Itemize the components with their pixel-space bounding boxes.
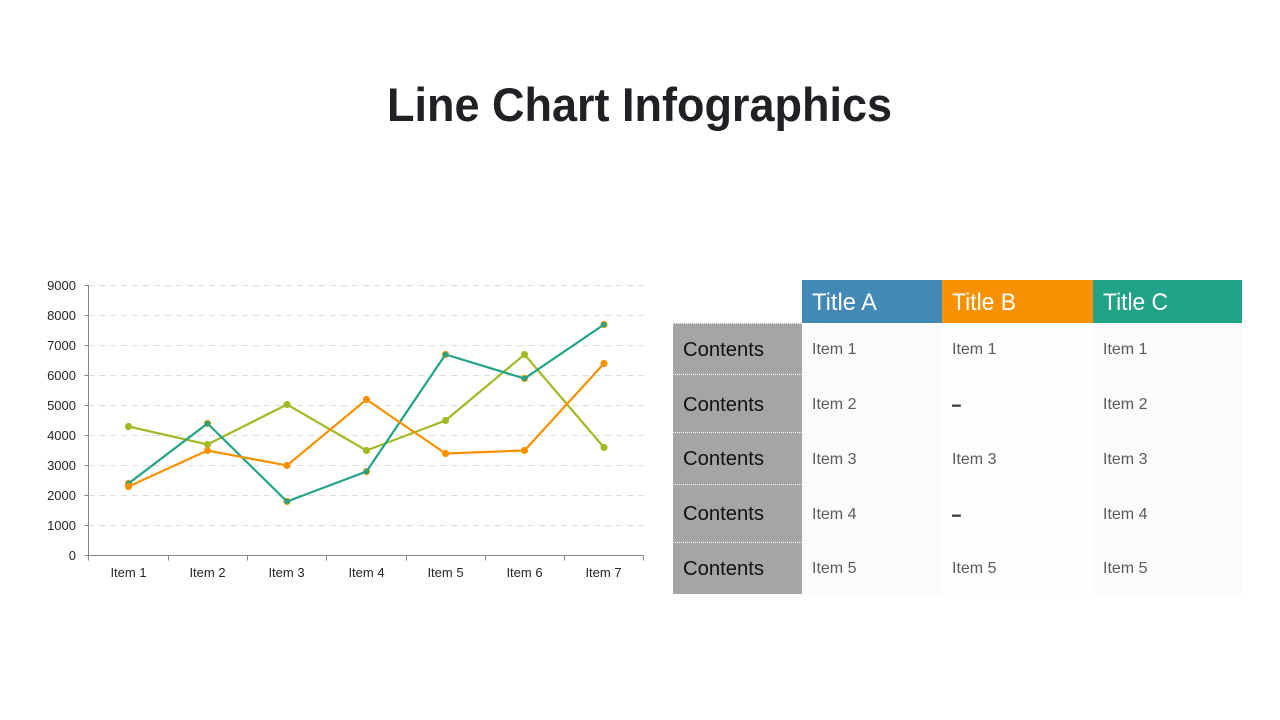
column C cells: Item 5 (1103, 560, 1148, 577)
y axis labels: 4000 (47, 428, 76, 443)
line chart (47, 278, 644, 580)
title: Line Chart Infographics (387, 78, 892, 131)
header: Title A: Title A (812, 289, 877, 316)
x axis labels: Item 3 (268, 565, 305, 580)
x axis labels: Item 1 (110, 565, 147, 580)
x axis labels: Item 6 (506, 565, 543, 580)
column A cells (802, 323, 942, 594)
column A cells: Item 4 (812, 506, 857, 523)
y axis labels: 9000 (47, 278, 76, 293)
column C cells: Item 1 (1103, 341, 1148, 358)
y axis labels: 7000 (47, 338, 76, 353)
x axis labels (110, 565, 622, 580)
row labels column: Contents (683, 503, 764, 525)
y axis labels: 1000 (47, 518, 76, 533)
header: Title B (942, 280, 1093, 323)
column B cells: – (952, 397, 961, 414)
y axis labels: 8000 (47, 308, 76, 323)
column C cells: Item 4 (1103, 506, 1148, 523)
y axis labels (47, 278, 76, 563)
y axis labels: 5000 (47, 398, 76, 413)
row labels column: Contents (683, 339, 764, 361)
column C cells: Item 3 (1103, 451, 1148, 468)
x axis labels: Item 5 (427, 565, 464, 580)
row labels column (673, 323, 802, 594)
header: Title B: Title B (952, 289, 1016, 316)
x axis labels: Item 7 (585, 565, 622, 580)
y axis labels: 3000 (47, 458, 76, 473)
column B cells (942, 323, 1093, 594)
comparison table (673, 280, 1242, 594)
header: Title A (802, 280, 942, 323)
header: Title C (1093, 280, 1242, 323)
column B cells: – (952, 507, 961, 524)
x axis labels: Item 4 (348, 565, 385, 580)
y axis labels: 0 (69, 548, 76, 563)
column B cells: Item 1 (952, 341, 997, 358)
series: lime (125, 351, 608, 454)
series: orange (125, 360, 608, 490)
row labels column: Contents (683, 558, 764, 580)
column A cells: Item 2 (812, 396, 857, 413)
column C cells (1093, 323, 1242, 594)
column C cells: Item 2 (1103, 396, 1148, 413)
column A cells: Item 1 (812, 341, 857, 358)
x axis labels: Item 2 (189, 565, 226, 580)
y axis labels: 6000 (47, 368, 76, 383)
row labels column: Contents (683, 448, 764, 470)
header: Title C: Title C (1103, 289, 1168, 316)
column B cells: Item 3 (952, 451, 997, 468)
column A cells: Item 3 (812, 451, 857, 468)
column B cells: Item 5 (952, 560, 997, 577)
row labels column: Contents (683, 394, 764, 416)
series: teal (125, 321, 608, 505)
column A cells: Item 5 (812, 560, 857, 577)
y axis labels: 2000 (47, 488, 76, 503)
